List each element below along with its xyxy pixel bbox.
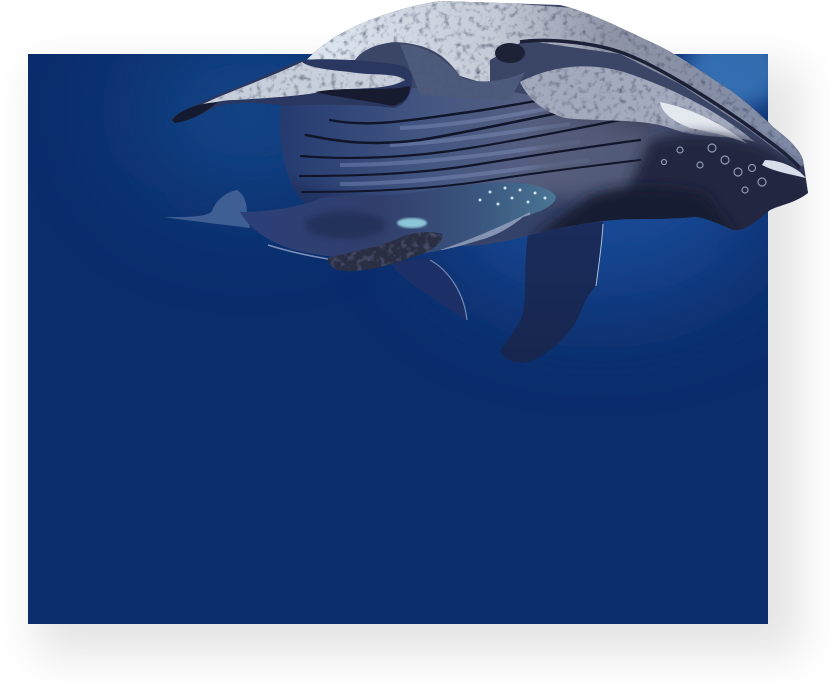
flipper pale top [192,62,405,110]
whale pale back [300,0,810,168]
whale shoulder [400,44,525,100]
flipper dark streak [315,86,410,106]
calf head spots [478,186,546,206]
calf flipper [328,232,442,271]
whale head barnacles [662,144,766,193]
whale dark jaw [530,188,735,240]
whale mid flank [528,121,666,204]
whale ridge line [520,40,800,168]
whale throat pleats [275,85,650,250]
whale pale flank patch [520,66,755,142]
whale pale snout [762,160,806,178]
whale rear flipper [500,222,603,363]
calf belly highlight [397,218,427,228]
calf body [240,183,556,257]
whale pectoral flipper [172,59,412,123]
pleat shade at lower belly [292,181,583,246]
calf tail fluke [164,190,250,228]
icon: humpback calf [164,183,556,272]
panel shadow [36,66,801,656]
calf pale throat [440,212,530,250]
whale eye [495,43,525,63]
whale small fin [388,258,467,320]
calf trailing edge [268,245,328,259]
icon: adult humpback whale [172,0,815,363]
pleat lines [300,92,640,192]
calf dark mottling [305,211,385,239]
panel: deep blue background [28,54,768,624]
flipper dark edge [172,102,218,123]
whale body [270,0,815,250]
whale dark head [625,134,815,240]
pale highlight bands [340,106,590,184]
panel glow [130,20,785,300]
whale bright head patch [660,102,748,144]
